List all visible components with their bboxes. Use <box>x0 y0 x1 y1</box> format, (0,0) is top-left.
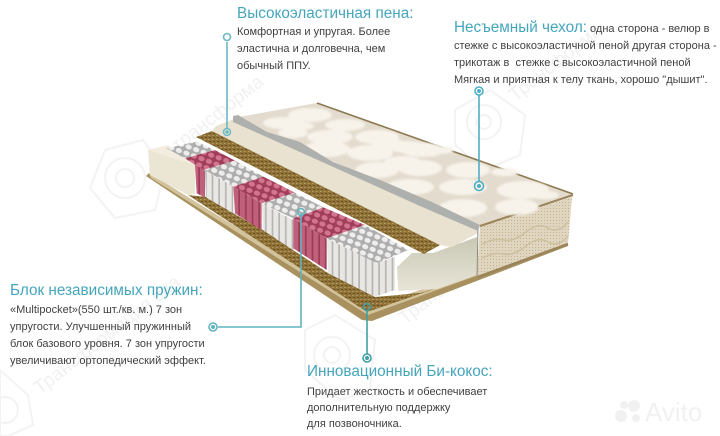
text: coir: дополнительную поддержку <box>307 402 450 414</box>
cover side panel <box>477 197 572 276</box>
connector: coir <box>363 304 371 362</box>
text: coir <box>307 386 488 430</box>
cover gray edge <box>233 115 480 231</box>
heading: foam: Высокоэластичная пена: <box>237 5 413 22</box>
heading: springs: Блок независимых пружин: <box>10 282 203 299</box>
quilted cover <box>233 103 573 277</box>
text: cover <box>454 19 717 86</box>
text: springs: блок базового уровня. 7 зон упругости <box>10 338 205 350</box>
connector: springs <box>209 208 304 331</box>
lower coir layer <box>188 195 437 312</box>
text: springs <box>10 304 206 367</box>
text: cover: Мягкая и приятная к телу ткань, хорошо "дышит". <box>454 74 708 86</box>
connector: foam <box>224 34 230 136</box>
middle coir layer <box>196 131 440 254</box>
text: coir: Придает жесткость и обеспечивает <box>307 386 487 398</box>
text: foam: обычный ППУ. <box>237 60 311 72</box>
avito logo: Avito <box>645 397 702 427</box>
text: foam <box>237 26 390 72</box>
right lower foam block <box>397 237 477 291</box>
text: cover: стежке с высокоэластичной пеной другая сторона - <box>454 40 717 52</box>
mattress illustration: трансформа <box>168 71 268 156</box>
heading: coir: Инновационный Би-кокос: <box>307 363 493 380</box>
spring block <box>167 142 408 297</box>
mattress illustration: Трансформация <box>395 224 521 329</box>
text: coir: для позвоночника. <box>307 418 402 430</box>
left foam block <box>148 145 196 195</box>
upper foam layer <box>212 119 478 247</box>
text: foam: Комфортная и упругая. Более <box>237 26 390 38</box>
text: foam: эластична и долговечна, чем <box>237 43 385 55</box>
text: springs: «Multipocket»(550 шт./кв. м.) 7 зон <box>10 304 182 316</box>
text: springs: увеличивают ортопедический эффект. <box>10 355 206 367</box>
text: cover: трикотаж в стежке с высокоэластичной пеной <box>454 57 691 69</box>
cover top <box>233 103 573 226</box>
mattress illustration: Трансформация сна <box>30 272 185 399</box>
connector: cover <box>474 87 484 190</box>
avito logo <box>615 397 702 427</box>
quilting pads <box>263 108 559 217</box>
text: springs: упругости. Улучшенный пружинный <box>10 321 191 333</box>
base board <box>146 173 568 321</box>
mattress illustration: Трансформа <box>505 20 607 106</box>
watermark <box>0 90 525 436</box>
text: cover: Несъемный чехол: одна сторона - велюр в <box>454 19 710 36</box>
